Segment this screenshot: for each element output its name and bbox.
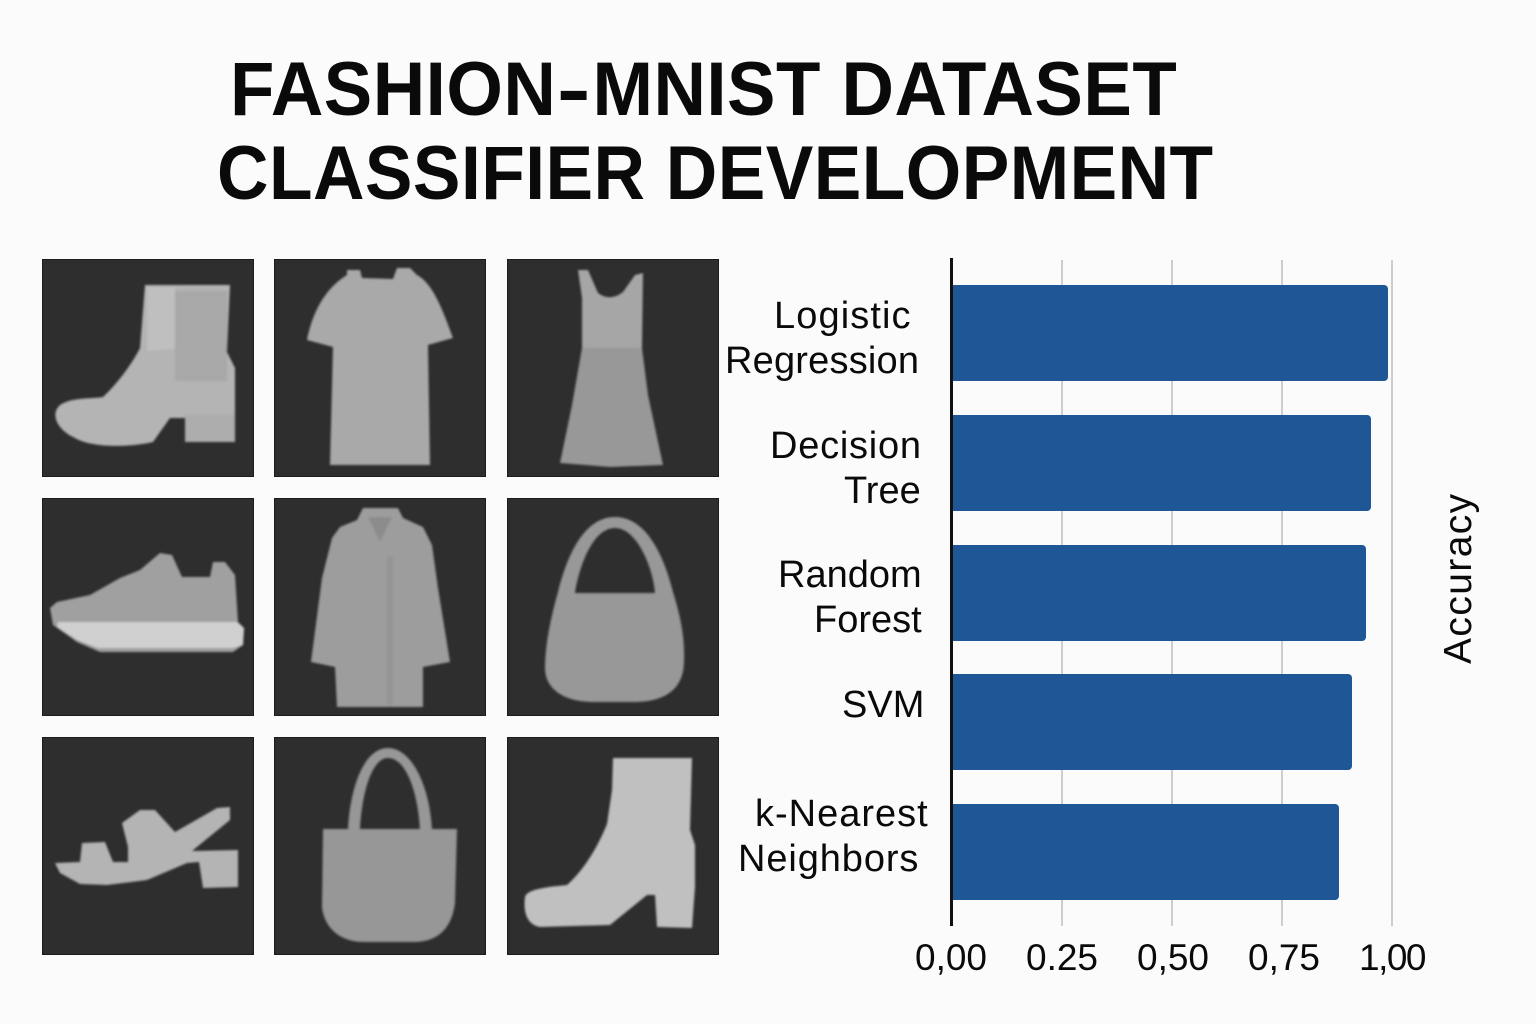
- icon: dress: [507, 259, 719, 477]
- label: Decision Tree: Decision: [770, 425, 922, 467]
- label: k-Nearest Neighbors: k-Nearest: [755, 793, 929, 835]
- title: CLASSIFIER DEVELOPMENT: [217, 131, 1214, 216]
- bar: k-Nearest Neighbors: [952, 804, 1339, 900]
- bar: Decision Tree: [952, 415, 1371, 511]
- title: FASHION MNIST DATASET: [230, 47, 1177, 132]
- label: k-Nearest Neighbors: [738, 793, 929, 880]
- label: Logistic Regression: Regression: [725, 340, 919, 382]
- axis tick: 0.25: 0.25: [1026, 937, 1098, 978]
- bar: SVM: [952, 674, 1352, 770]
- label: Decision Tree: [770, 425, 922, 512]
- title: [217, 47, 1214, 216]
- label: Logistic Regression: [725, 295, 919, 382]
- axis tick: 1,00: 1,00: [1359, 937, 1425, 978]
- label: Decision Tree: Tree: [844, 470, 921, 512]
- label: Random Forest: Random: [778, 554, 922, 596]
- label: Logistic Regression: Logistic: [774, 295, 912, 337]
- axis tick: 0,50: 0,50: [1137, 937, 1209, 978]
- label: Random Forest: [778, 554, 922, 641]
- panel: image grid: [42, 259, 719, 955]
- icon: boot: [507, 737, 719, 955]
- label: Random Forest: Forest: [814, 599, 922, 641]
- icon: tote bag: [274, 737, 486, 955]
- icon: coat: [274, 498, 486, 716]
- label: k-Nearest Neighbors: Neighbors: [738, 838, 919, 880]
- bar: Logistic Regression: [952, 285, 1388, 381]
- bar chart: [725, 258, 1480, 978]
- bar: Random Forest: [952, 545, 1366, 641]
- icon: t-shirt: [274, 259, 486, 477]
- axis tick: 0,00: 0,00: [915, 937, 987, 978]
- label: SVM: SVM: [842, 684, 924, 726]
- title: -: [557, 47, 592, 132]
- icon: handbag: [507, 498, 719, 716]
- icon: ankle boot: [42, 259, 254, 477]
- icon: sandal: [42, 737, 254, 955]
- axis tick: 0,75: 0,75: [1248, 937, 1320, 978]
- icon: sneaker: [42, 498, 254, 716]
- axis title: Accuracy: Accuracy: [1437, 492, 1480, 664]
